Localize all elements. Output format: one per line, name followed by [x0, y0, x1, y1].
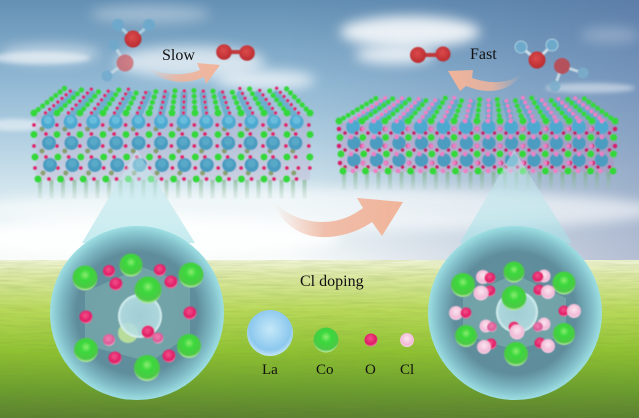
legend: O: [364, 334, 378, 378]
right slab front atoms: [339, 121, 616, 171]
left slab front face tint: [36, 114, 310, 180]
left slab front atoms: [34, 113, 311, 179]
legend: [247, 310, 414, 378]
right slab reflection: [342, 172, 614, 198]
oxygen molecule left: [216, 44, 255, 61]
right lens cone: [460, 150, 572, 243]
arrow: fast: [448, 70, 522, 91]
legend: La: [247, 310, 293, 378]
magnifier: right lens: [428, 150, 602, 400]
legend: La: La: [262, 362, 278, 378]
left lens atoms: [72, 254, 204, 381]
left slab top face: [34, 88, 310, 119]
right lens disc: [428, 226, 602, 400]
label: Slow: Slow: [162, 47, 195, 64]
right slab top face: [339, 97, 615, 126]
legend: Cl: Cl: [400, 362, 414, 378]
legend: Co: Co: [316, 362, 334, 378]
legend: O: O: [365, 362, 376, 378]
legend: Co: [314, 328, 338, 378]
left lens disc: [50, 226, 224, 400]
water molecule upper right: [515, 39, 558, 68]
right lens atoms: [449, 262, 581, 366]
label: Fast: Fast: [470, 46, 497, 63]
right lens unit cell face: [463, 274, 566, 350]
arrow: slow: [148, 63, 220, 84]
left lens cone: [82, 150, 195, 243]
right perovskite slab: [339, 97, 616, 185]
right slab front face tint: [340, 122, 614, 172]
left slab reflection: [38, 180, 310, 206]
arrow: Cl doping transition: [273, 198, 403, 237]
background: grass field: [0, 260, 639, 418]
legend: Cl: [400, 333, 414, 378]
water molecule upper left: [112, 19, 155, 48]
magnifier: left lens: [50, 150, 224, 400]
label: Cl doping: Cl doping: [300, 273, 364, 290]
background: sky: [0, 0, 639, 262]
water molecule lower right: [550, 58, 588, 92]
left perovskite slab: [34, 88, 311, 193]
left lens unit cell face: [85, 267, 190, 362]
oxygen molecule right: [410, 46, 450, 63]
water molecule lower left: [102, 40, 134, 82]
